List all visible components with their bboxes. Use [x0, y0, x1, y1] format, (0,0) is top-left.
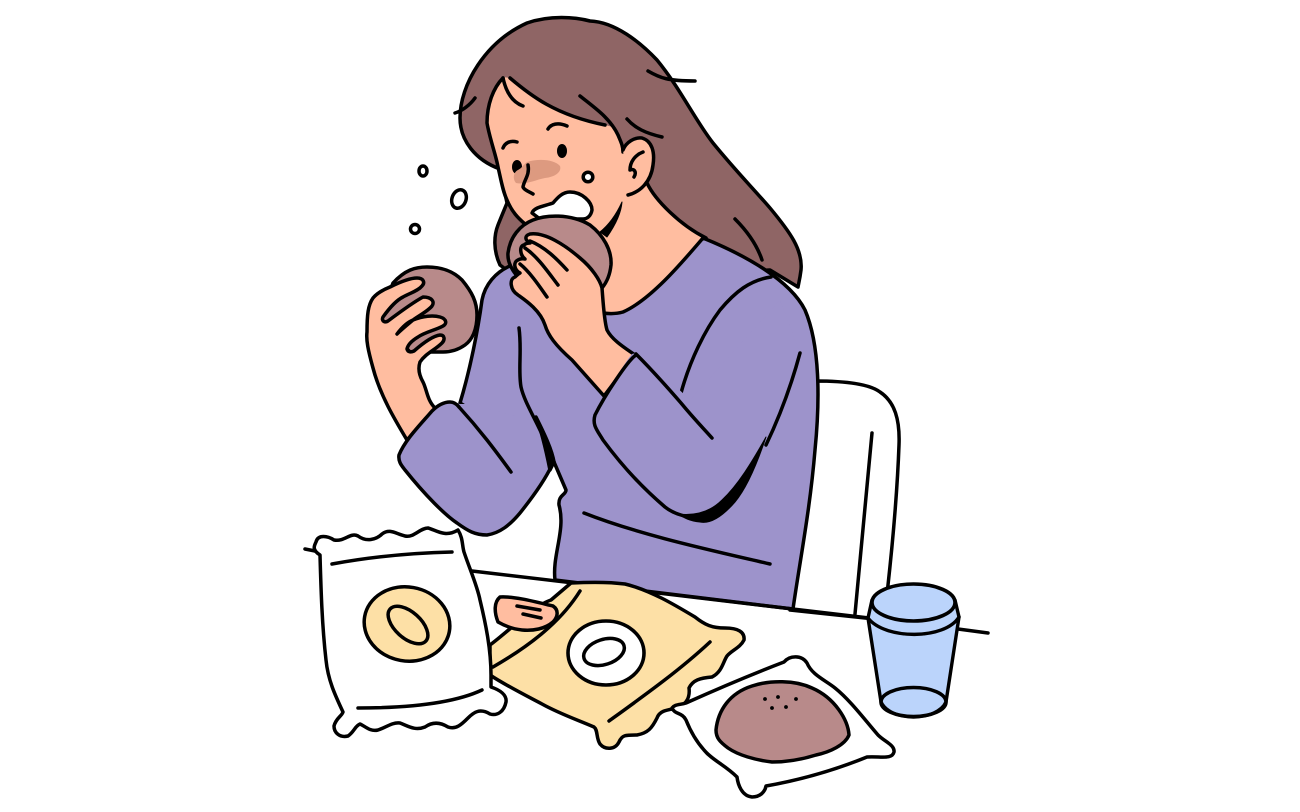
sweater torso — [460, 238, 818, 609]
left sleeve — [399, 402, 552, 535]
eyebrows — [503, 124, 567, 148]
eyes — [512, 144, 567, 174]
bag logo — [568, 621, 644, 685]
inner arm fold — [519, 328, 554, 470]
sleeve shadow — [678, 437, 766, 522]
wrapped bun — [672, 657, 894, 797]
left forearm and hand — [367, 278, 446, 440]
right sleeve — [594, 300, 800, 522]
bun in left hand — [380, 267, 477, 352]
chair — [790, 381, 899, 620]
table edge — [305, 549, 988, 633]
face and neck — [487, 77, 706, 325]
crumb on cheek — [583, 172, 593, 182]
bun held at mouth — [508, 216, 611, 290]
yellow snack bag — [490, 582, 744, 748]
fingers — [520, 241, 567, 297]
hair — [455, 18, 801, 287]
blue cup — [868, 584, 959, 717]
ear — [623, 138, 654, 195]
chip — [495, 597, 557, 630]
blush — [514, 160, 560, 183]
food in mouth — [532, 192, 592, 219]
sweater fold lines — [584, 277, 771, 564]
bag logo — [358, 580, 456, 668]
bun seeds — [763, 695, 798, 710]
bun — [716, 682, 849, 762]
crumbs in the air — [410, 166, 469, 234]
hair strands — [455, 71, 762, 260]
white snack bag — [314, 528, 506, 736]
jaw shadow — [600, 202, 622, 237]
right forearm and hand — [511, 234, 635, 396]
nose — [523, 165, 533, 194]
neck line — [647, 183, 706, 238]
hairline — [510, 78, 605, 125]
face outline — [487, 78, 525, 224]
